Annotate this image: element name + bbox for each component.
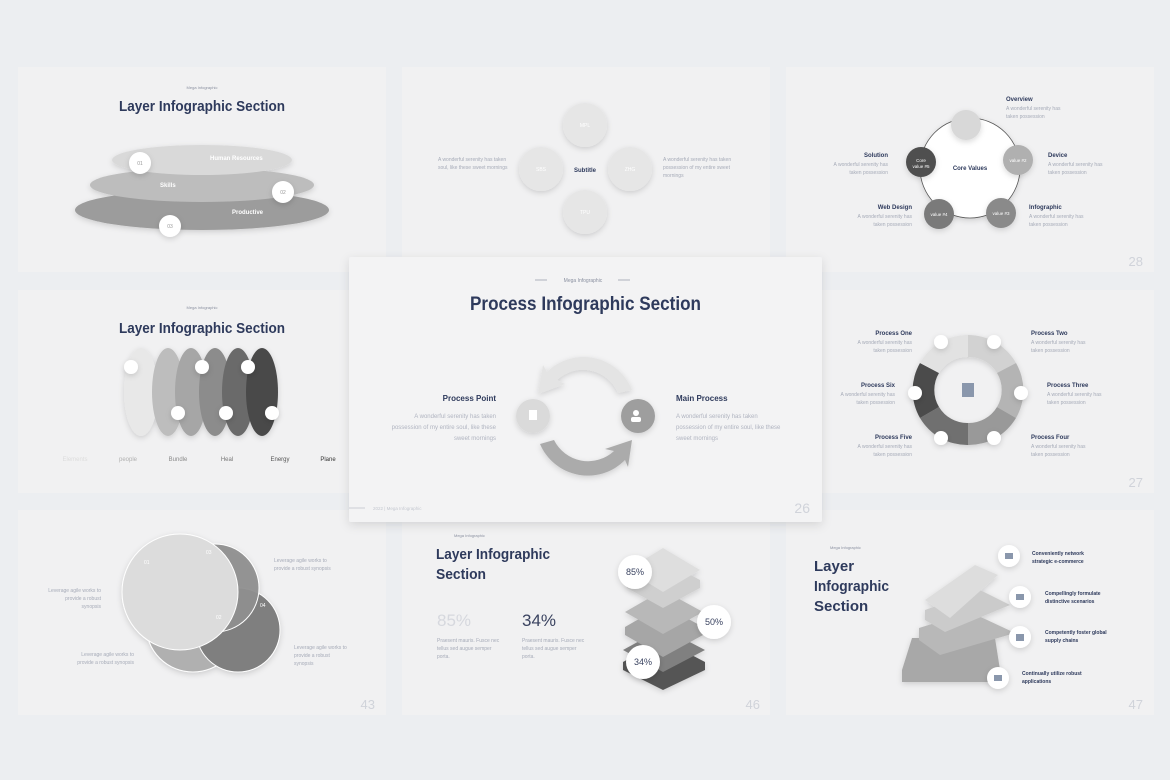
slide: layer ellipses middle-left: Bundle bbox=[169, 457, 188, 463]
slide: process infographic center (featured): possession of my entire soul, like these bbox=[392, 425, 497, 431]
slide: core values top-right: Infographic bbox=[1029, 205, 1062, 211]
slide: layer stack bottom-middle: 34% bbox=[634, 657, 652, 667]
slide: layer stack bottom-middle bbox=[402, 510, 770, 715]
slide: process ring middle-right: Process Five bbox=[875, 435, 913, 441]
slide: circle process top-middle: soul, like these sweet mornings bbox=[438, 165, 508, 171]
slide: process ring middle-right: Process Three bbox=[1047, 383, 1089, 389]
slide: process ring middle-right: Process Four bbox=[1031, 435, 1070, 441]
slide: venn bottom-left: provide a robust bbox=[294, 653, 330, 659]
slide: layer slabs bottom-right: distinctive scenarios bbox=[1045, 599, 1095, 605]
slide: process ring middle-right: Process Two bbox=[1031, 331, 1068, 337]
slide: core values top-right: taken possession bbox=[849, 170, 888, 176]
right text: Main Process bbox=[676, 394, 728, 403]
slide: layer stack bottom-middle: Mega Infographic bbox=[454, 533, 485, 538]
slide: layer stack bottom-middle: Section bbox=[436, 566, 486, 583]
slide: layer ellipses middle-left: Energy bbox=[270, 457, 290, 463]
slide: layer slabs bottom-right: Competently foster global bbox=[1045, 630, 1107, 636]
slide: layer slabs bottom-right: Compellingly formulate bbox=[1045, 591, 1101, 597]
slide: core values top-right: value #4 bbox=[930, 212, 948, 217]
slide: process ring middle-right: taken possession bbox=[873, 452, 912, 458]
slide: circle process top-middle: Subtitle bbox=[574, 168, 597, 174]
slide: core values top-right: value #5 bbox=[912, 164, 930, 169]
slide: process infographic center (featured): 2022 | Mega Infographic bbox=[373, 506, 422, 511]
slide: core values top-right: A wonderful serenity has bbox=[1029, 214, 1084, 220]
slide: venn bottom-left: Leverage agile works to bbox=[81, 652, 134, 658]
slide: core values top-right: A wonderful serenity has bbox=[834, 162, 888, 168]
slide: layer ellipses middle-left: people bbox=[119, 457, 138, 463]
slide: core values top-right: taken possession bbox=[873, 222, 912, 228]
slide: venn bottom-left: synopsis bbox=[294, 661, 314, 667]
slide: core values top-right: Overview bbox=[1006, 97, 1033, 103]
slide: process ring middle-right: taken possession bbox=[1031, 452, 1070, 458]
slide: layer ellipses middle-left: Plane bbox=[320, 457, 336, 463]
slide: layer stack bottom-middle: 46 bbox=[746, 697, 760, 712]
slide: process ring middle-right: Process Six bbox=[861, 383, 896, 389]
slide: layer infographic top-left: 01 bbox=[137, 161, 143, 167]
slide: core values top-right: Solution bbox=[864, 153, 888, 159]
slide: layer ellipses middle-left: Layer Infographic Section bbox=[119, 320, 285, 337]
slide: circle process top-middle: mornings bbox=[663, 173, 684, 179]
slide: core values top-right: taken possession bbox=[1006, 114, 1045, 120]
slide: layer stack bottom-middle: 85% bbox=[626, 567, 644, 577]
slide: layer ellipses middle-left: Heal bbox=[221, 457, 233, 463]
slide: venn bottom-left: 04 bbox=[260, 603, 266, 609]
slide: core values top-right: Core bbox=[916, 158, 926, 163]
slide: layer ellipses middle-left: Elements bbox=[62, 457, 88, 463]
slide: circle process top-middle: SBS bbox=[536, 167, 547, 173]
slide: layer slabs bottom-right: applications bbox=[1022, 679, 1051, 685]
slide: layer slabs bottom-right: Infographic bbox=[814, 578, 889, 595]
slide: layer infographic top-left: Human Resources bbox=[210, 156, 263, 162]
slide: layer stack bottom-middle: tellus sed augue semper bbox=[522, 646, 577, 652]
slide: layer infographic top-left: Productive bbox=[232, 210, 264, 216]
cycle arrows bbox=[538, 357, 632, 476]
slide: layer slabs bottom-right: Layer bbox=[814, 558, 854, 575]
slide: core values top-right: value #3 bbox=[992, 211, 1010, 216]
slide: layer slabs bottom-right bbox=[786, 510, 1154, 715]
slide: process infographic center (featured): possession of my entire soul, like these bbox=[676, 425, 781, 431]
slide: venn bottom-left: 03 bbox=[206, 550, 212, 556]
slide: layer slabs bottom-right: strategic e-commerce bbox=[1032, 559, 1084, 565]
slide: layer slabs bottom-right: Section bbox=[814, 598, 868, 615]
slide: layer slabs bottom-right: Mega Infographic bbox=[830, 545, 861, 550]
slide: process ring middle-right: Process One bbox=[875, 331, 913, 337]
slide: process ring middle-right: A wonderful serenity has bbox=[1031, 444, 1086, 450]
slide: process infographic center (featured): A wonderful serenity has taken bbox=[414, 414, 496, 420]
slide: core values top-right: taken possession bbox=[1048, 170, 1087, 176]
slide: circle process top-middle: MPL bbox=[580, 123, 590, 129]
slide: core values top-right bbox=[786, 67, 1154, 272]
slide: layer slabs bottom-right: Continually utilize robust bbox=[1022, 671, 1082, 677]
slide: core values top-right: Device bbox=[1048, 153, 1068, 159]
slide: venn bottom-left: 02 bbox=[216, 615, 222, 621]
slide: layer ellipses middle-left bbox=[18, 290, 386, 493]
slide: process ring middle-right: 27 bbox=[1129, 475, 1143, 490]
slide: process infographic center (featured): 26 bbox=[794, 500, 810, 516]
slide: venn bottom-left: provide a robust synopsis bbox=[274, 566, 331, 572]
slide: layer stack bottom-middle: porta. bbox=[437, 654, 450, 660]
slide: layer infographic top-left: Skills bbox=[160, 183, 176, 189]
slide: core values top-right: A wonderful serenity has bbox=[858, 214, 912, 220]
slide: venn bottom-left: 43 bbox=[361, 697, 375, 712]
slide: circle process top-middle: possession of my entire sweet bbox=[663, 165, 731, 171]
slide: process ring middle-right: A wonderful serenity has bbox=[841, 392, 895, 398]
slide: layer stack bottom-middle: 85% bbox=[437, 611, 471, 630]
title: Process Infographic Section bbox=[470, 293, 701, 315]
title: Layer Infographic Section bbox=[119, 98, 285, 115]
slide: layer stack bottom-middle: Praesent mauris. Fusce nec bbox=[522, 638, 585, 644]
slide: process ring middle-right: taken possession bbox=[856, 400, 895, 406]
slide: layer infographic top-left bbox=[18, 67, 386, 272]
slide: core values top-right: A wonderful serenity has bbox=[1006, 106, 1061, 112]
slide: process ring middle-right: A wonderful serenity has bbox=[858, 444, 912, 450]
slide: layer stack bottom-middle: porta. bbox=[522, 654, 535, 660]
slide: process infographic center (featured) bbox=[349, 257, 822, 522]
slide: process ring middle-right: taken possession bbox=[1047, 400, 1086, 406]
slide: process infographic center (featured): sweet mornings bbox=[676, 436, 718, 442]
slide: venn bottom-left: synopsis bbox=[82, 604, 102, 610]
slide: core values top-right: 28 bbox=[1129, 254, 1143, 269]
slide: core values top-right: Core Values bbox=[953, 166, 988, 172]
slide: process ring middle-right: taken possession bbox=[873, 348, 912, 354]
slide: venn bottom-left: 01 bbox=[144, 560, 150, 566]
slide: layer slabs bottom-right: 47 bbox=[1129, 697, 1143, 712]
slide: layer stack bottom-middle: 50% bbox=[705, 617, 723, 627]
slide: process infographic center (featured): A wonderful serenity has taken bbox=[676, 414, 758, 420]
slide: layer stack bottom-middle: Layer Infographic bbox=[436, 546, 550, 563]
slide: venn bottom-left: Leverage agile works to bbox=[274, 558, 327, 564]
slide: circle process top-middle bbox=[402, 67, 770, 272]
slide: venn bottom-left: provide a robust synopsis bbox=[77, 660, 134, 666]
slide: layer infographic top-left: Mega Infographic bbox=[187, 85, 217, 90]
slide: layer infographic top-left: 02 bbox=[280, 190, 286, 196]
slide: circle process top-middle: A wonderful serenity has taken bbox=[438, 157, 506, 163]
slide: core values top-right: value #2 bbox=[1009, 158, 1027, 163]
slide: layer slabs bottom-right: Conveniently network bbox=[1032, 551, 1084, 557]
slide: process ring middle-right: A wonderful serenity has bbox=[858, 340, 912, 346]
slide: circle process top-middle: A wonderful serenity has taken bbox=[663, 157, 731, 163]
slide: venn bottom-left: Leverage agile works to bbox=[294, 645, 347, 651]
slide: layer infographic top-left: 03 bbox=[167, 224, 173, 230]
slide: circle process top-middle: ZHG bbox=[625, 167, 635, 173]
icon circles bbox=[516, 399, 550, 433]
slide: process ring middle-right: A wonderful serenity has bbox=[1047, 392, 1102, 398]
slide: core values top-right: Web Design bbox=[878, 205, 912, 211]
slide: process ring middle-right: A wonderful serenity has bbox=[1031, 340, 1086, 346]
layered ellipses bbox=[75, 145, 329, 230]
slide: process infographic center (featured): Mega Infographic bbox=[564, 278, 603, 284]
slide: layer stack bottom-middle: Praesent mauris. Fusce nec bbox=[437, 638, 500, 644]
left text: Process Point bbox=[443, 394, 496, 403]
slide: core values top-right: taken possession bbox=[1029, 222, 1068, 228]
slide: circle process top-middle: TPU bbox=[580, 210, 590, 216]
slide: layer stack bottom-middle: tellus sed augue semper bbox=[437, 646, 492, 652]
slide: core values top-right: A wonderful serenity has bbox=[1048, 162, 1103, 168]
slide: process ring middle-right: taken possession bbox=[1031, 348, 1070, 354]
slide: layer stack bottom-middle: 34% bbox=[522, 611, 556, 630]
slide: process infographic center (featured): sweet mornings bbox=[454, 436, 496, 442]
slide: layer ellipses middle-left: Mega Infographic bbox=[187, 305, 217, 310]
slide: process ring middle-right bbox=[786, 290, 1154, 493]
slide: venn bottom-left: provide a robust bbox=[65, 596, 102, 602]
slide: layer slabs bottom-right: supply chains bbox=[1045, 638, 1079, 644]
slide: venn bottom-left bbox=[18, 510, 386, 715]
slide: venn bottom-left: Leverage agile works to bbox=[48, 588, 101, 594]
